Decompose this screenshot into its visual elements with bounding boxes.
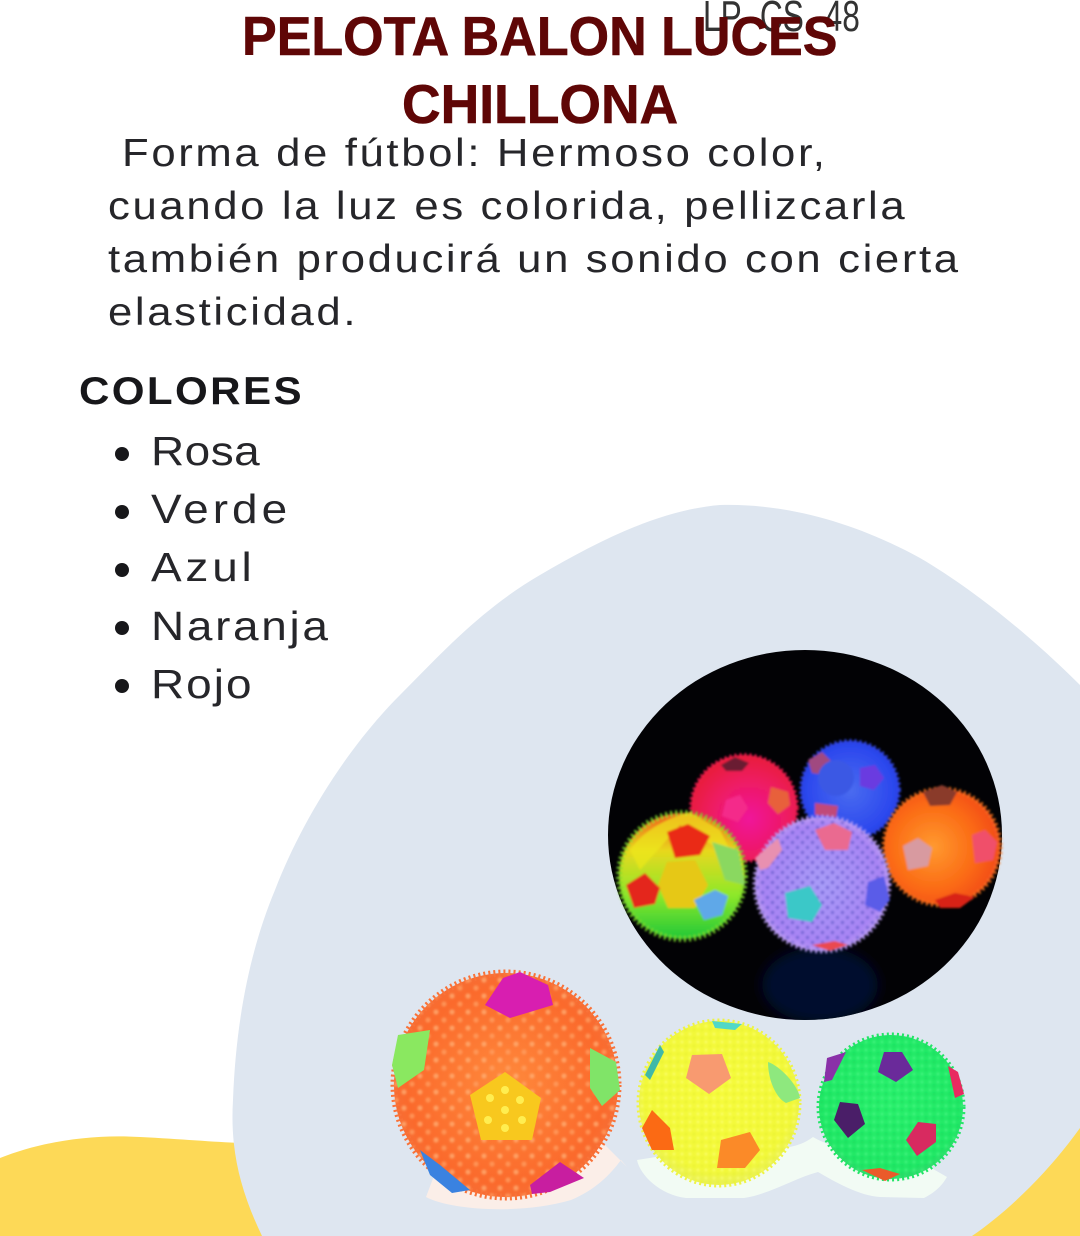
description: Forma de fútbol: Hermoso color, — [122, 132, 828, 175]
pink ball — [691, 755, 797, 861]
yellow blob right — [972, 1128, 1080, 1236]
orange ball — [392, 972, 620, 1197]
green ball — [819, 1035, 964, 1181]
colors list: Verde — [151, 486, 291, 532]
colors heading: COLORES — [79, 370, 304, 413]
description — [108, 132, 961, 334]
lilac ball — [755, 817, 890, 951]
photo: three daylight balls — [392, 972, 964, 1209]
description: cuando la luz es colorida, pellizcarla — [108, 185, 907, 228]
title: CHILLONA — [402, 73, 678, 135]
yellow blob left — [0, 1136, 270, 1236]
description: elasticidad. — [108, 291, 358, 334]
white glow under orange ball — [426, 1140, 627, 1209]
blue ball — [801, 741, 899, 839]
pale blue blob — [232, 505, 1080, 1236]
title: PELOTA BALON LUCES — [242, 5, 838, 67]
rainbow ball — [619, 812, 745, 939]
colors list: Rojo — [151, 661, 254, 707]
yellow ball — [639, 1021, 800, 1185]
colors list: Azul — [151, 544, 256, 590]
colors list: Naranja — [151, 603, 331, 649]
reflection — [762, 947, 878, 1023]
orange ball — [884, 785, 1000, 908]
colors list: Rosa — [151, 428, 260, 474]
colors list — [115, 428, 331, 707]
photo: glowing balls in black circle — [608, 650, 1002, 1023]
white glow under yellow and green balls — [637, 1137, 947, 1198]
title — [242, 5, 838, 135]
description: también producirá un sonido con cierta — [108, 238, 961, 281]
